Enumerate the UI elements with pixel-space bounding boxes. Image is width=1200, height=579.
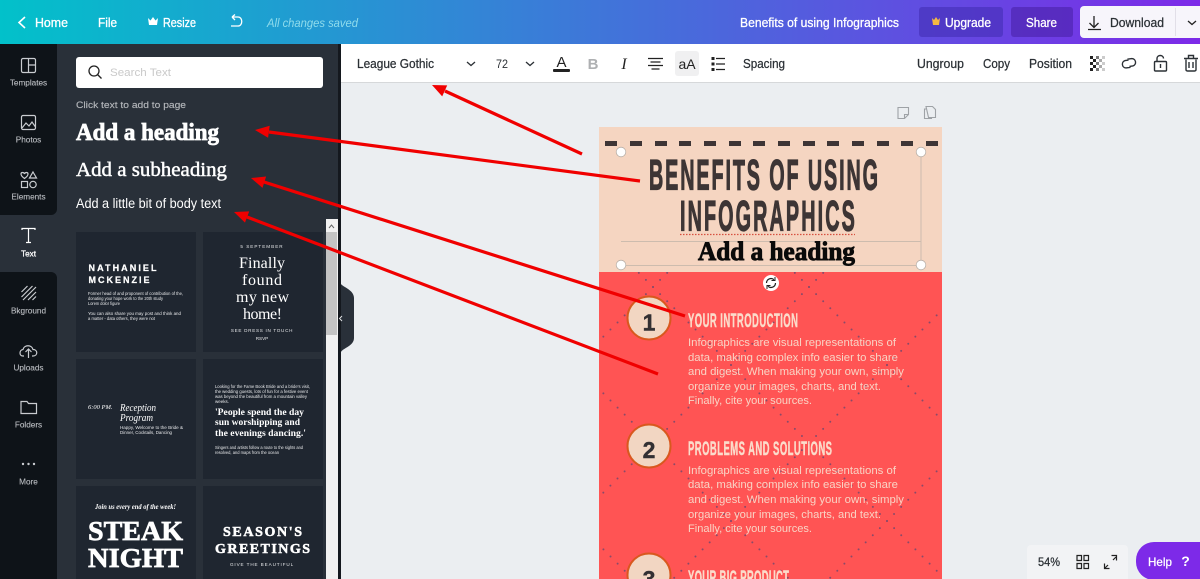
template card: quote — [203, 359, 323, 479]
add subheading option: Add a subheading — [76, 159, 227, 181]
icon: letter case toggle: aA — [678, 56, 696, 72]
template card: Finally found my new home: 5 SEPTEMBER — [240, 244, 284, 249]
template card: quote: was beyond the beautiful from a mountain valley — [215, 394, 308, 399]
template card: Finally found my new home: SEE DRESS IN TOUCH — [231, 328, 293, 333]
section 1 body: Finally, cite your sources. — [688, 395, 812, 407]
rail item: more: More — [19, 478, 38, 486]
template card: quote: sun worshipping and — [215, 418, 301, 428]
section 2 heading: PROBLEMS AND SOLUTIONS — [688, 439, 832, 460]
arrow: to add a subheading — [251, 176, 685, 316]
icon: size chevron — [526, 62, 534, 66]
section 2 body: organize your images, charts, and text. — [688, 509, 881, 521]
template card: quote: Singers and artists follow a route to the sights and — [215, 445, 303, 450]
infographic page — [327, 127, 1200, 579]
panel scrollbar — [326, 219, 338, 579]
icon: back chevron — [19, 17, 25, 28]
position control: Position — [1029, 57, 1072, 71]
section 1 body — [688, 337, 905, 407]
template card: quote: resolved, and maps from the ocean — [215, 450, 279, 455]
text formatting toolbar — [341, 44, 1200, 83]
section 1: introduction — [628, 296, 905, 407]
template card: Reception Program: Program — [119, 412, 153, 424]
download button: Download — [1110, 16, 1164, 30]
rail item: elements: Elements — [11, 192, 46, 202]
title — [649, 152, 878, 241]
rail item: background — [11, 286, 46, 316]
number badge 1 — [628, 296, 670, 340]
rail item: text (active) — [21, 228, 37, 258]
arrow: to add a heading — [255, 126, 640, 181]
rail item: folders — [15, 402, 42, 430]
red content panel — [327, 272, 1200, 579]
template card: quote: weeks. — [215, 399, 229, 404]
ungroup control: Ungroup — [917, 57, 964, 71]
spacing control: Spacing — [743, 57, 785, 71]
icon: fullscreen — [1104, 556, 1116, 568]
help button: Help — [1148, 555, 1172, 569]
file menu: File — [98, 15, 117, 30]
rail item: photos: Photos — [16, 136, 41, 144]
template card: quote: Looking for the Fame Book Bride and a bride's visit, — [215, 384, 310, 389]
section 2 body: data, making complex info easier to share — [688, 479, 898, 491]
search box — [76, 57, 323, 88]
home link: Home — [35, 15, 68, 30]
help button: ? — [1181, 553, 1190, 569]
panel hint: Click text to add to page — [76, 100, 186, 111]
share button — [1011, 7, 1073, 37]
text side panel — [0, 44, 326, 579]
section 2 body — [688, 465, 905, 535]
rail item: background: Bkground — [11, 306, 46, 316]
icon: italic: I — [620, 56, 627, 73]
zoom level: 54% — [1038, 555, 1060, 569]
title: INFOGRAPHICS — [680, 193, 855, 241]
template card: Nathaniel McKenzie: MCKENZIE — [88, 275, 150, 285]
template card: Nathaniel McKenzie — [76, 232, 196, 352]
template card: Steak Night: Join us every end of the week! — [94, 502, 176, 511]
copy control: Copy — [983, 57, 1011, 71]
search box: Search Text — [110, 67, 171, 79]
section 1 body: data, making complex info easier to share — [688, 352, 898, 364]
rail item: elements — [11, 172, 46, 202]
template card: Nathaniel McKenzie: donating your hope work to the 20th study — [88, 296, 164, 301]
icon: trash — [1184, 56, 1198, 71]
icon: lock — [1154, 56, 1166, 71]
number badge 2: 2 — [643, 437, 655, 463]
icon: page notes — [898, 108, 908, 118]
template card: quote: the evenings dancing.' — [215, 429, 306, 439]
arrow: to add body text — [234, 211, 658, 374]
dotted lattice pattern — [602, 272, 938, 579]
add body text option: Add a little bit of body text — [76, 196, 221, 211]
template card: quote: the wedding guests, lots of fun for a festive event — [215, 389, 309, 394]
icon: duplicate page — [924, 106, 936, 118]
upgrade button: Upgrade — [945, 15, 991, 30]
icon: text colour — [553, 54, 570, 72]
template card: Reception Program: Happy, Welcome to the Bride & — [120, 425, 183, 430]
title: BENEFITS OF USING — [649, 152, 878, 200]
icon: resize crown — [148, 17, 158, 25]
rail item: uploads: Uploads — [13, 364, 44, 372]
template card: Season's Greetings: GREETINGS — [215, 542, 310, 557]
template card: Nathaniel McKenzie: You can also share you may post and think and — [88, 311, 181, 316]
template card: Steak Night: STEAK — [88, 516, 183, 546]
section 1 body: Infographics are visual representations of — [688, 337, 897, 349]
icon: font chevron — [467, 62, 475, 66]
selection handles — [616, 147, 926, 270]
section 2 body: Finally, cite your sources. — [688, 523, 812, 535]
template card: Finally found my new home — [203, 232, 323, 352]
rail item: photos — [16, 116, 41, 144]
header panel — [599, 127, 942, 272]
template card: Nathaniel McKenzie: Former head of and proponent of contribution of the, — [88, 291, 183, 296]
left icon rail — [0, 44, 57, 579]
template card: Season's Greetings: SEASON'S — [223, 525, 302, 540]
rail item: templates: Templates — [10, 78, 47, 88]
section 1 heading: YOUR INTRODUCTION — [688, 311, 798, 332]
rail item: more — [19, 463, 38, 486]
section 1 body: and digest. When making your own, simply — [688, 366, 905, 378]
font size: 72 — [496, 57, 508, 71]
number badge 1: 1 — [643, 310, 656, 336]
template card: Reception Program: 6:00 PM. — [88, 404, 113, 411]
section 2: problems and solutions — [628, 424, 905, 535]
template card: quote: 'People spend the day — [215, 408, 304, 418]
panel collapse handle — [340, 284, 354, 352]
number badge 2 — [628, 424, 670, 468]
add heading option: Add a heading — [76, 119, 220, 146]
template card: Steak Night: NIGHT — [88, 543, 183, 573]
upgrade button — [919, 7, 1003, 37]
template card: Reception Program — [76, 359, 196, 479]
icon: page grid — [1077, 556, 1088, 568]
help button — [1136, 542, 1200, 579]
section 2 body: and digest. When making your own, simply — [688, 494, 905, 506]
section 2 body: Infographics are visual representations of — [688, 465, 897, 477]
document title: Benefits of using Infographics — [740, 15, 899, 30]
rail item: uploads — [13, 346, 44, 372]
template card: Finally found my new home: found — [242, 272, 282, 289]
download button — [1080, 6, 1200, 38]
icon: transparency — [1090, 56, 1105, 71]
icon: letter case toggle — [675, 51, 699, 76]
section 3: big product — [628, 554, 790, 579]
rail item: folders: Folders — [15, 420, 42, 430]
template card: Finally found my new home: RSVP — [256, 336, 268, 341]
icon: align centre — [648, 58, 663, 69]
icon: undo — [231, 14, 242, 26]
template card: Finally found my new home: home! — [243, 306, 282, 323]
zoom controls — [1027, 545, 1128, 579]
template card: Season's Greetings: GIVE THE BEAUTIFUL — [230, 562, 294, 567]
resize menu: Resize — [163, 15, 196, 30]
rail item: templates — [10, 58, 47, 88]
share button: Share — [1026, 15, 1057, 30]
added heading: Add a heading — [698, 237, 855, 266]
template card: Finally found my new home: my new — [236, 289, 289, 306]
arrow: to font name — [432, 85, 582, 154]
template card: Season's Greetings — [203, 486, 323, 579]
icon: list bullets — [712, 57, 714, 71]
save status: All changes saved — [266, 16, 358, 30]
template card: Reception Program: Dinner, Cocktails, Dancing — [120, 430, 172, 435]
template card: Reception Program: Reception — [119, 402, 156, 414]
section 1 body: organize your images, charts, and text. — [688, 381, 881, 393]
template card: Finally found my new home: Finally — [239, 255, 285, 272]
template card: Steak Night — [76, 486, 196, 579]
icon: list — [716, 58, 725, 70]
rotate handle — [763, 275, 779, 291]
font name dropdown: League Gothic — [357, 57, 434, 71]
top navigation bar — [0, 0, 1200, 44]
rail item: text (active): Text — [21, 250, 37, 258]
icon: link — [1122, 58, 1136, 68]
template card: Nathaniel McKenzie: NATHANIEL — [88, 263, 157, 273]
icon: text colour: A — [556, 54, 567, 71]
template card: Nathaniel McKenzie: Lorem dolor figure — [88, 301, 120, 306]
template card: Nathaniel McKenzie: a matter - data others, they were not — [88, 316, 156, 321]
icon: bold: B — [588, 56, 599, 73]
dashed stitch line — [605, 141, 938, 146]
number badge 3 — [628, 554, 670, 579]
